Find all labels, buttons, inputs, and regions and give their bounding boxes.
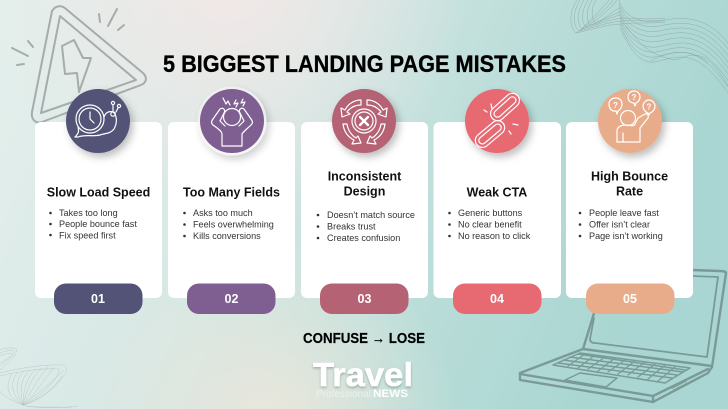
- bullet list: Takes too long: [59, 208, 118, 218]
- heading: Design: [344, 184, 385, 198]
- number pill: [586, 284, 674, 314]
- icon: stressed person: [198, 86, 266, 156]
- icon: snail with clock: [66, 89, 130, 153]
- bullet list: Asks too much: [193, 208, 253, 218]
- icon: broken cycle: [332, 89, 396, 153]
- bullet list: Generic buttons: [458, 208, 523, 218]
- bullet list: [448, 208, 531, 241]
- heading: Too Many Fields: [183, 186, 280, 200]
- bullet list: No clear benefit: [458, 220, 522, 230]
- bullet list: People leave fast: [589, 208, 659, 218]
- bullet list: [49, 208, 137, 240]
- panel: inconsistent design: [301, 89, 428, 314]
- icon: confused person with question marks: ?: [613, 101, 618, 110]
- panel: slow load speed: [35, 89, 162, 314]
- number pill: 05: [623, 292, 637, 306]
- bullet list: [183, 208, 274, 241]
- heading: Rate: [616, 184, 643, 198]
- icon: confused person with question marks: [598, 89, 662, 153]
- bullet list: [579, 208, 663, 241]
- card background: [301, 122, 428, 298]
- heading: [328, 170, 402, 198]
- icon: confused person with question marks: ?: [632, 93, 637, 102]
- number pill: [187, 284, 276, 314]
- logo: travel professional news: Travel: [313, 356, 413, 393]
- number pill: 03: [358, 292, 371, 306]
- number pill: 02: [225, 292, 238, 306]
- bullet list: Fix speed first: [59, 230, 116, 240]
- heading: Weak CTA: [467, 186, 527, 200]
- heading: Slow Load Speed: [47, 186, 150, 200]
- card background: [566, 122, 693, 298]
- bullet list: Offer isn’t clear: [589, 220, 650, 230]
- card background: [434, 122, 561, 298]
- icon: warning triangle with lightning bolt: [12, 6, 146, 122]
- decorative wave bottom left: [0, 348, 78, 408]
- heading: High Bounce: [591, 170, 668, 184]
- card background: [168, 122, 295, 298]
- bullet list: Page isn’t working: [589, 231, 663, 241]
- bullet list: [317, 210, 415, 243]
- bullet list: No reason to click: [458, 231, 531, 241]
- number pill: 04: [490, 292, 504, 306]
- bullet list: Breaks trust: [327, 222, 376, 232]
- card background: [35, 122, 162, 298]
- icon: confused person with question marks: ?: [647, 102, 652, 112]
- decorative wave top right: [571, 0, 728, 93]
- number pill: [320, 284, 408, 314]
- bullet list: Feels overwhelming: [193, 220, 274, 230]
- number pill: 01: [91, 292, 105, 306]
- icon: broken chain: [465, 89, 529, 153]
- decorative laptop: [520, 270, 726, 402]
- heading: [591, 170, 668, 198]
- heading: Inconsistent: [328, 170, 402, 184]
- bullet list: Doesn’t match source: [327, 210, 415, 220]
- panel: too many fields: [168, 86, 295, 314]
- number pill: [453, 284, 542, 314]
- bullet list: Creates confusion: [327, 233, 400, 243]
- tagline: CONFUSE → LOSE: [303, 331, 425, 347]
- number pill: [54, 284, 142, 314]
- logo: travel professional news: NEWS: [373, 388, 408, 400]
- bullet list: People bounce fast: [59, 219, 137, 229]
- panel: weak cta: [434, 89, 561, 314]
- logo: travel professional news: Professional: [316, 389, 371, 400]
- bullet list: Kills conversions: [193, 231, 261, 241]
- panel: high bounce rate: [566, 89, 693, 314]
- title: 5 BIGGEST LANDING PAGE MISTAKES: [163, 51, 566, 78]
